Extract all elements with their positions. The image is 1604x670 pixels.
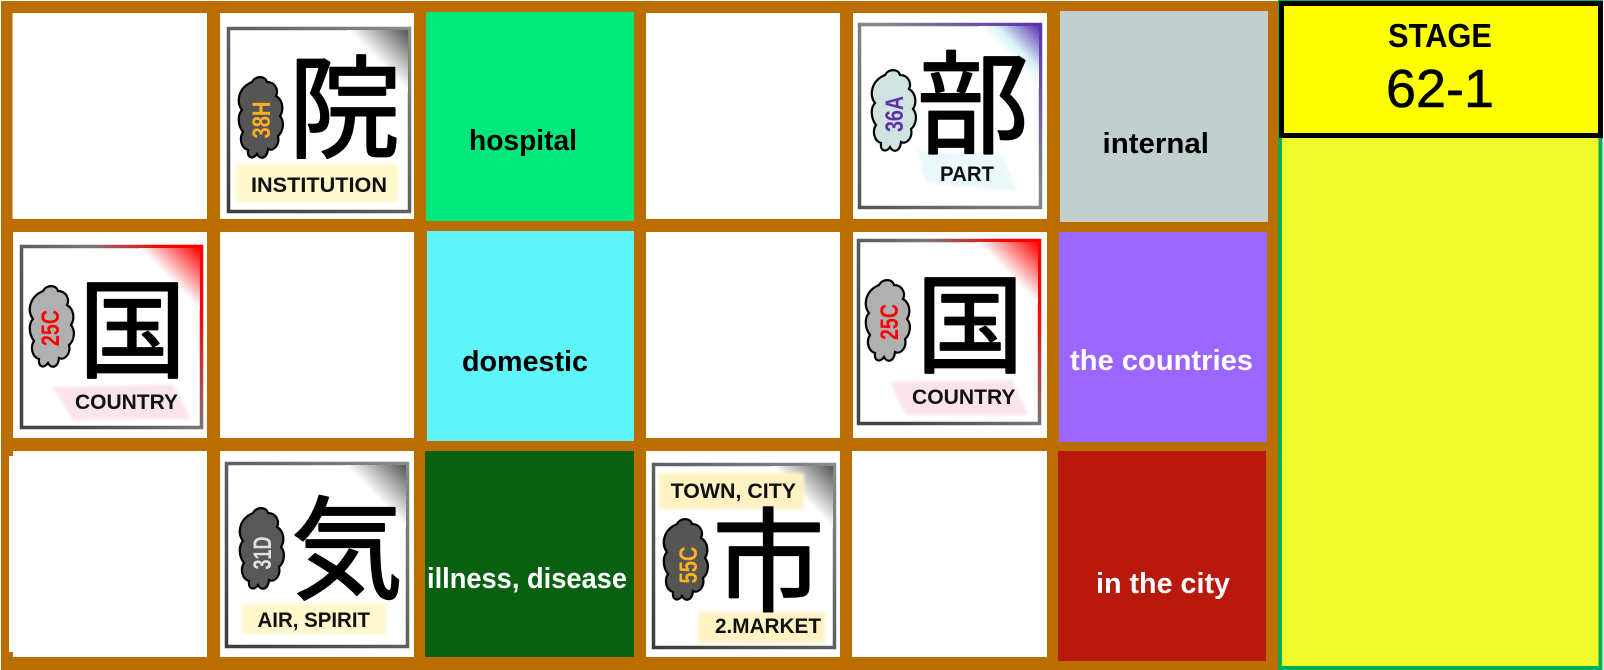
cell: hospital: hospital	[469, 125, 577, 157]
cell: domestic: domestic	[462, 346, 588, 378]
cell: empty row 3 column 1	[9, 451, 207, 657]
kanji: 国: 国	[916, 240, 1024, 396]
icon: cloud 38H	[239, 77, 283, 158]
icon: cloud 38H: 38H	[248, 102, 276, 138]
heading: stage number: STAGE	[1388, 17, 1492, 54]
label band: town city: TOWN, CITY	[671, 480, 796, 503]
label band: institution: INSTITUTION	[251, 174, 387, 197]
cell: empty row 2 column 2	[220, 232, 414, 438]
label band: part: PART	[940, 163, 994, 186]
cell: illness, disease	[425, 451, 634, 657]
cell: empty row 3 column 5	[852, 451, 1047, 657]
heading: stage number	[1282, 4, 1600, 136]
label band: country	[53, 385, 191, 420]
kanji: 気: 気	[291, 461, 403, 623]
cell: the countries: the countries	[1070, 345, 1253, 377]
card: country kanji right	[853, 232, 1047, 438]
icon: cloud 25C	[30, 286, 74, 367]
cell: domestic	[427, 231, 634, 441]
kanji: 部: 部	[917, 16, 1029, 178]
card: air spirit kanji	[220, 451, 414, 657]
label band: air spirit	[242, 604, 386, 634]
kanji: 市: 市	[712, 473, 824, 635]
cell: hospital	[426, 12, 634, 221]
label band: town city	[659, 473, 804, 509]
label band: country: COUNTRY	[912, 386, 1016, 409]
card: hospital kanji institution	[220, 13, 414, 219]
icon: cloud 36A	[872, 70, 916, 151]
icon: cloud 36A: 36A	[881, 96, 909, 132]
cell: in the city	[1058, 451, 1266, 661]
icon: cloud 55C	[664, 519, 708, 600]
panel: answer area	[1280, 2, 1600, 668]
card: country kanji left	[13, 232, 207, 438]
icon: cloud 25C: 25C	[37, 310, 65, 346]
cell: the countries	[1059, 232, 1267, 442]
board background	[1, 1, 1278, 670]
cell: illness, disease: illness, disease	[427, 563, 627, 595]
icon: cloud 25C	[866, 280, 910, 361]
label band: country	[890, 380, 1028, 415]
icon: cloud 31D: 31D	[249, 536, 277, 570]
label band: institution	[236, 164, 398, 202]
label band: air spirit: AIR, SPIRIT	[258, 609, 370, 632]
cell: internal	[1060, 11, 1268, 222]
card: town city market kanji	[646, 451, 840, 657]
label band: part	[917, 150, 1016, 191]
label band: country: COUNTRY	[75, 391, 178, 414]
cell: internal: internal	[1102, 128, 1209, 160]
cell: empty row 2 column 4	[646, 232, 840, 438]
heading: stage number: 62-1	[1386, 59, 1494, 119]
icon: cloud 25C: 25C	[876, 304, 904, 340]
icon: cloud 55C: 55C	[675, 546, 703, 584]
cell: empty row 1 column 1	[12, 13, 207, 219]
card: part kanji	[853, 13, 1047, 219]
cell: in the city: in the city	[1096, 568, 1230, 600]
kanji: 院: 院	[288, 20, 400, 182]
cell: empty row 1 column 4	[646, 13, 840, 219]
kanji: 国: 国	[78, 245, 187, 401]
icon: cloud 31D	[240, 508, 284, 589]
label band: market	[698, 612, 825, 643]
label band: market: 2.MARKET	[715, 615, 821, 638]
